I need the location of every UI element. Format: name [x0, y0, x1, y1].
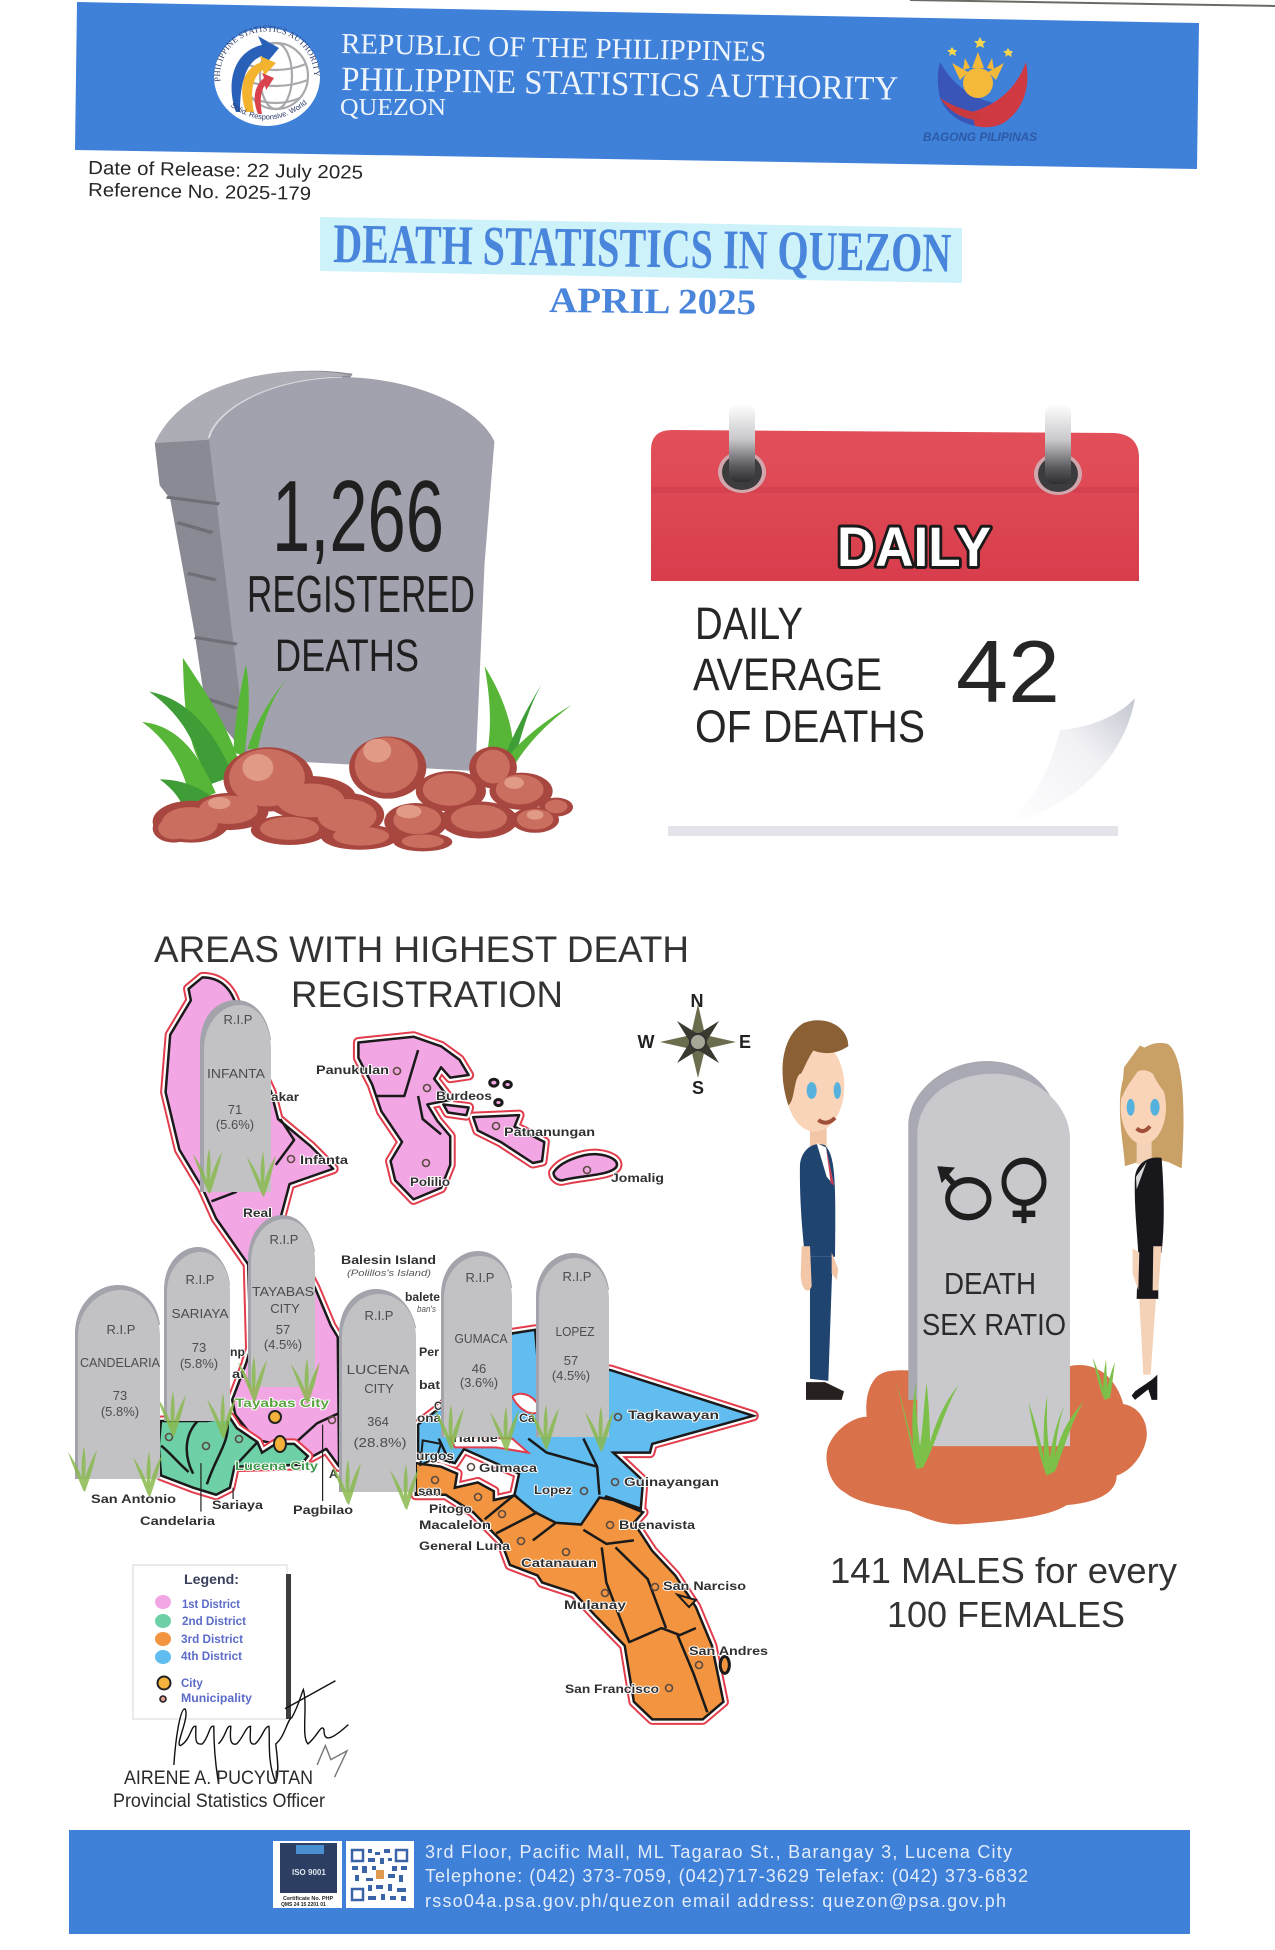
calendar red header [651, 404, 1139, 581]
map place names: akar [271, 1090, 299, 1104]
map place names: Lucena City [235, 1459, 318, 1473]
map place names: Guinayangan [624, 1475, 719, 1489]
legend: Legend: [184, 1571, 239, 1587]
legend labels: Municipality [181, 1693, 253, 1705]
tombstone text [922, 1266, 1066, 1342]
release date and reference: Date of Release: 22 July 2025 [88, 158, 363, 184]
title [320, 213, 962, 322]
north and Polillo land [166, 977, 617, 1466]
tombstone [908, 1061, 1070, 1446]
compass [638, 991, 751, 1098]
signature [174, 1681, 348, 1782]
tombstone: Candelaria: (5.8%) [101, 1404, 139, 1419]
map place names: Ca [519, 1411, 535, 1425]
map heading [154, 929, 689, 1015]
tombstone: Sariaya: SARIAYA [172, 1306, 229, 1321]
tombstone illustration [142, 371, 573, 851]
tombstone: Gumaca: R.I.P [466, 1270, 494, 1285]
map place names: Pitogo [429, 1502, 472, 1516]
tombstone text: DEATHS [275, 630, 419, 681]
map place names: General Luna [419, 1539, 510, 1553]
legend labels [181, 1599, 253, 1705]
legend labels: 1st District [182, 1599, 240, 1611]
gender symbols [940, 1161, 1044, 1223]
map of Quezon [91, 977, 768, 1719]
map place names: Tayabas City [235, 1396, 329, 1410]
calendar: daily average [651, 404, 1139, 836]
ISO certificate badge [273, 1841, 342, 1908]
businessman [783, 1020, 848, 1400]
map place names: at [232, 1367, 245, 1381]
tombstone: Lopez: (4.5%) [552, 1368, 590, 1383]
contact details: 3rd Floor, Pacific Mall, ML Tagarao St., Barangay 3, Lucena City [425, 1842, 1012, 1862]
PSA logo [214, 26, 320, 126]
agency name [340, 28, 898, 121]
tombstone: Lucena City: CITY [364, 1381, 394, 1396]
map place names: Mulanay [564, 1598, 626, 1612]
compass: W [638, 1032, 654, 1052]
tombstone: Candelaria: R.I.P [107, 1322, 135, 1337]
sex ratio caption: 100 FEMALES [887, 1594, 1125, 1635]
daily average text: OF DEATHS [695, 701, 925, 752]
tombstone: Tayabas City: (4.5%) [264, 1337, 302, 1352]
agency name: PHILIPPINE STATISTICS AUTHORITY [341, 61, 898, 108]
map place names: Real [243, 1206, 272, 1220]
QR code [346, 1841, 414, 1908]
Bagong Pilipinas logo: BAGONG PILIPINAS [923, 132, 1037, 144]
tombstone: Tayabas City [238, 1215, 320, 1404]
map city and municipality markers [166, 1068, 702, 1692]
tombstone: Lucena City: R.I.P [365, 1308, 393, 1323]
tombstone: registered deaths [142, 371, 573, 851]
map place names: rlaride [453, 1431, 498, 1445]
map place names: np [230, 1345, 245, 1359]
signatory: AIRENE A. PUCYUTAN [124, 1768, 313, 1789]
map place names: Buenavista [619, 1518, 695, 1532]
tombstone: Infanta: INFANTA [207, 1066, 265, 1081]
Bagong Pilipinas logo [923, 37, 1037, 144]
daily average text: DAILY [695, 598, 803, 649]
map place names: Polilio [410, 1175, 450, 1189]
map place names: Macalelon [419, 1518, 491, 1532]
tombstone text: DEATH [944, 1266, 1036, 1301]
map place names [91, 1063, 768, 1696]
tombstone text: SEX RATIO [922, 1307, 1066, 1342]
map place names: A [329, 1467, 338, 1481]
legend swatches [155, 1595, 171, 1702]
map place names: san [418, 1484, 441, 1498]
map place names: Balesin Island [341, 1253, 436, 1267]
tombstone: Sariaya: 73 [192, 1340, 206, 1355]
map place names: Candelaria [140, 1514, 215, 1528]
tombstone: Infanta [193, 1000, 276, 1197]
tombstone: Gumaca: GUMACA [454, 1331, 508, 1346]
contact details: rsso04a.psa.gov.ph/quezon email address: quezon@psa.gov.ph [425, 1891, 1006, 1911]
tombstone: Infanta: 71 [228, 1102, 242, 1117]
map place names: Per [419, 1345, 439, 1359]
map place names: Pagbilao [293, 1503, 353, 1517]
tombstone: Lucena City: LUCENA [346, 1362, 410, 1377]
tombstone: Gumaca: (3.6%) [460, 1375, 498, 1390]
grass tufts [895, 1358, 1115, 1476]
legend labels: 3rd District [181, 1634, 243, 1646]
tombstone: Lucena City [332, 1289, 419, 1510]
signatory [113, 1768, 326, 1812]
map place names: Sariaya [212, 1498, 263, 1512]
map place names: Lopez [534, 1483, 572, 1497]
ISO certificate badge: QMS 24 15 2201 01 [281, 1902, 326, 1908]
map place names: Infanta [300, 1153, 348, 1167]
tombstone: Sariaya: R.I.P [186, 1272, 214, 1287]
map place names: Jomalig [611, 1171, 664, 1185]
map place names: balete [405, 1290, 440, 1304]
rocks [153, 736, 573, 851]
map place names: San Francisco [565, 1682, 659, 1696]
businesswoman [1120, 1043, 1184, 1400]
ISO certificate badge: Certificate No. PHP [283, 1896, 333, 1902]
map place names: ban's [417, 1304, 436, 1314]
compass: E [739, 1032, 751, 1052]
tombstone text [247, 461, 475, 681]
tombstone: Candelaria: CANDELARIA [80, 1355, 160, 1370]
tombstone: Sariaya: (5.8%) [180, 1356, 218, 1371]
legend [133, 1565, 291, 1719]
sex ratio caption [830, 1550, 1177, 1635]
footer banner [69, 1830, 1190, 1934]
map place names: San Antonio [91, 1492, 176, 1506]
agency name: QUEZON [340, 95, 446, 121]
tombstone: Sariaya [157, 1247, 236, 1439]
signatory: Provincial Statistics Officer [113, 1791, 326, 1812]
map place names: San Andres [689, 1644, 768, 1658]
daily average text: AVERAGE [693, 649, 882, 700]
legend labels: City [181, 1678, 203, 1690]
map place names: Panukulan [316, 1063, 389, 1077]
tombstone: Infanta: (5.6%) [216, 1117, 254, 1132]
map place names: Tagkawayan [628, 1408, 719, 1422]
calendar page [651, 581, 1137, 836]
daily average text: 42 [956, 622, 1060, 721]
compass: N [690, 991, 704, 1011]
map place names: Burdeos [436, 1089, 492, 1103]
PSA logo: PHILIPPINE STATISTICS AUTHORITY [214, 26, 320, 82]
map place names: Gumaca [479, 1461, 537, 1475]
map place names: Patnanungan [504, 1125, 595, 1139]
ISO certificate badge: ISO 9001 [292, 1868, 326, 1877]
tombstone: Tayabas City: TAYABAS [252, 1284, 314, 1299]
south land [159, 1330, 753, 1719]
tombstone text: REGISTERED [247, 566, 475, 624]
title: DEATH STATISTICS IN QUEZON [333, 213, 952, 285]
legend labels: 4th District [181, 1651, 242, 1663]
tombstone: Tayabas City: 57 [276, 1322, 290, 1337]
release date and reference [88, 158, 363, 205]
tombstone: Gumaca [435, 1251, 519, 1452]
compass: S [692, 1078, 704, 1098]
map place names: urgos [416, 1449, 454, 1463]
soil mound [826, 1365, 1147, 1524]
tombstone: Lopez: 57 [564, 1353, 578, 1368]
daily average text [693, 598, 1060, 752]
tombstone: Lopez: LOPEZ [556, 1324, 595, 1339]
calendar red header: DAILY [837, 515, 991, 578]
tombstone: Gumaca: 46 [472, 1361, 486, 1376]
sex ratio caption: 141 MALES for every [830, 1550, 1177, 1591]
map place names: ona [417, 1411, 441, 1425]
tombstone: Tayabas City: R.I.P [270, 1232, 298, 1247]
header banner [75, 2, 1199, 169]
map place names: Catanauan [521, 1556, 597, 1570]
title: APRIL 2025 [549, 280, 756, 322]
agency name: REPUBLIC OF THE PHILIPPINES [341, 28, 766, 68]
tombstone: Candelaria [68, 1285, 162, 1497]
grass [142, 658, 572, 810]
tombstone: Lopez: R.I.P [563, 1269, 591, 1284]
tombstone: Candelaria: 73 [113, 1388, 127, 1403]
tombstone: Lopez [530, 1253, 614, 1452]
contact details [425, 1842, 1028, 1911]
legend labels: 2nd District [182, 1616, 246, 1628]
map place names: C [434, 1399, 442, 1413]
map heading: AREAS WITH HIGHEST DEATH [154, 929, 689, 970]
contact details: Telephone: (042) 373-7059, (042)717-3629 Telefax: (042) 373-6832 [425, 1866, 1028, 1886]
tombstone: Tayabas City: CITY [270, 1301, 300, 1316]
sex ratio illustration [783, 1020, 1184, 1524]
tombstone: Infanta: R.I.P [224, 1012, 252, 1027]
tombstone text: 1,266 [272, 461, 444, 573]
map place names: (Polillos's Island) [347, 1268, 431, 1278]
release date and reference: Reference No. 2025-179 [88, 180, 311, 205]
tombstone: Lucena City: 364 [367, 1414, 389, 1429]
map heading: REGISTRATION [291, 974, 563, 1015]
tombstone: Lucena City: (28.8%) [354, 1435, 406, 1450]
map place names: bat [419, 1378, 440, 1392]
map place names: San Narciso [663, 1579, 746, 1593]
